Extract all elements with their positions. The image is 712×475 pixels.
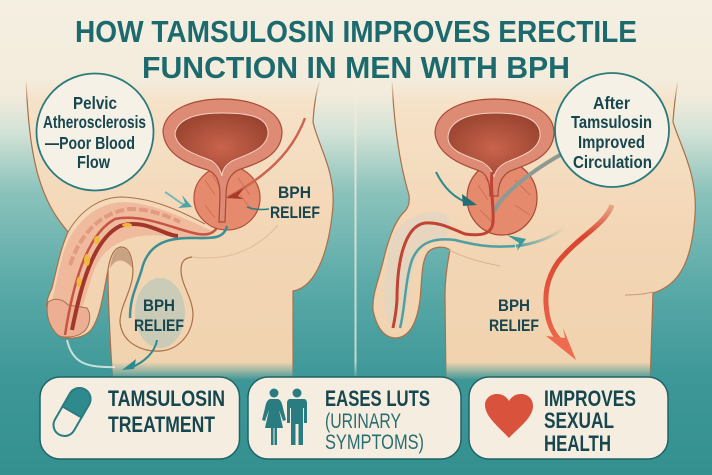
card text: SEXUAL — [544, 408, 614, 433]
icon: people — [262, 388, 307, 445]
lower abdomen fold — [192, 225, 278, 258]
teal exit arrow — [122, 340, 157, 370]
teal arrow right — [507, 228, 565, 251]
card: eases LUTS — [248, 377, 461, 459]
card text: EASES LUTS — [325, 386, 430, 411]
scrotum shading — [135, 278, 185, 348]
card text: TAMSULOSIN — [108, 386, 225, 411]
card subtext: SYMPTOMS) — [325, 431, 424, 454]
label: BPH relief upper: BPH — [278, 183, 311, 202]
scrotum outline — [108, 247, 193, 351]
callout: pelvic atherosclerosis: —Poor Blood — [45, 133, 135, 153]
scrotum arch shading — [110, 248, 132, 268]
card text: HEALTH — [544, 431, 611, 456]
teal arrow to prostate right — [436, 172, 477, 206]
title: HOW TAMSULOSIN IMPROVES ERECTILE — [75, 14, 637, 49]
label: BPH relief upper — [270, 183, 320, 222]
shaft tip — [47, 299, 90, 337]
bladder right — [435, 99, 554, 196]
callout: after tamsulosin: After — [593, 93, 630, 113]
arrowhead in prostate — [226, 188, 244, 199]
callout: pelvic atherosclerosis — [36, 74, 154, 190]
panel: after treatment — [373, 73, 695, 385]
callout: after tamsulosin: Improved — [578, 132, 645, 152]
icon: capsule — [49, 384, 95, 440]
artery to prostate — [228, 118, 305, 197]
BPH relief leader — [247, 207, 269, 210]
callout: pelvic atherosclerosis: Pelvic — [73, 93, 117, 113]
shaft tissue — [50, 202, 215, 335]
card text: IMPROVES — [544, 386, 636, 411]
teal vessel — [130, 226, 227, 318]
shaft shading — [384, 212, 450, 328]
label: BPH relief right — [489, 296, 539, 335]
card text — [108, 386, 225, 437]
bladder left — [163, 99, 282, 222]
label: BPH relief right: RELIEF — [489, 316, 539, 335]
label: BPH relief right: BPH — [498, 296, 530, 315]
card: improves sexual health — [469, 377, 668, 459]
callout: after tamsulosin — [555, 73, 669, 187]
white flow curve — [67, 340, 115, 367]
prostate left — [194, 166, 260, 230]
teal vessel right — [400, 239, 515, 328]
prostate right — [467, 161, 537, 235]
card subtext — [325, 410, 424, 454]
callout: pelvic atherosclerosis: Flow — [77, 152, 110, 172]
label: BPH relief lower: RELIEF — [134, 316, 184, 335]
urethra vessels — [65, 205, 222, 335]
callout: after tamsulosin: Tamsulosin — [571, 112, 652, 132]
icon: heart — [485, 394, 533, 438]
red arrow — [546, 205, 612, 360]
label: BPH relief lower — [134, 296, 184, 335]
teal arrow to prostate — [165, 192, 192, 208]
shaft outer line — [68, 197, 205, 232]
plaque deposits — [76, 223, 132, 287]
card: tamsulosin treatment — [40, 377, 240, 459]
body silhouette right — [373, 80, 695, 385]
panel: before treatment — [26, 74, 333, 385]
body silhouette left — [26, 80, 333, 385]
callout: after tamsulosin: Circulation — [573, 152, 652, 172]
corpus dashes — [70, 209, 180, 265]
title: FUNCTION IN MEN WITH BPH — [142, 50, 570, 85]
buttock crease — [625, 292, 653, 295]
callout: pelvic atherosclerosis: Atherosclerosis — [43, 112, 146, 132]
fold line — [449, 250, 500, 266]
title — [75, 14, 637, 85]
label: BPH relief upper: RELIEF — [270, 203, 320, 222]
label: BPH relief lower: BPH — [143, 296, 175, 315]
card text — [544, 386, 636, 456]
grey vessel — [494, 155, 560, 212]
red urethra — [393, 172, 493, 328]
card text: TREATMENT — [108, 412, 215, 437]
card subtext: (URINARY — [325, 410, 401, 433]
panel divider — [354, 80, 356, 376]
